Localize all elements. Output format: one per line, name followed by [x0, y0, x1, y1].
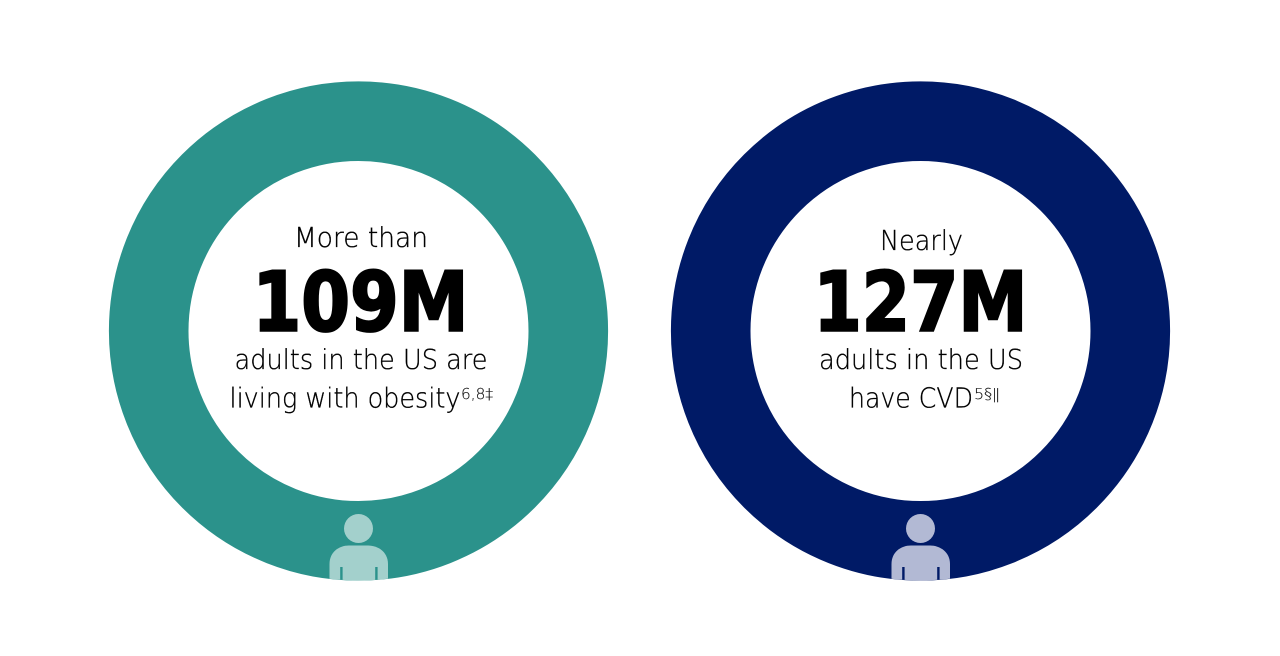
number: 109M: 109M — [252, 256, 468, 350]
number: 127M: 127M — [814, 256, 1028, 350]
text: adults in the US are: adults in the US are — [234, 344, 488, 376]
text: living with obesity: living with obesity — [230, 382, 460, 414]
panel: CVD statistic — [711, 121, 1130, 590]
panel: obesity statistic — [149, 121, 568, 590]
text: More than: More than — [294, 222, 428, 254]
icon: person on teal ring — [330, 514, 388, 580]
text: Nearly: Nearly — [880, 225, 963, 257]
navy ring — [711, 121, 1130, 541]
text: have CVD: have CVD — [849, 382, 973, 414]
teal ring — [149, 121, 568, 541]
text: have CVD: 5§ǁ — [974, 385, 1000, 403]
infographic — [108, 81, 1170, 581]
icon: person on navy ring — [892, 514, 950, 580]
text: adults in the US: adults in the US — [819, 344, 1023, 376]
text: living with obesity: 6,8‡ — [461, 385, 494, 403]
